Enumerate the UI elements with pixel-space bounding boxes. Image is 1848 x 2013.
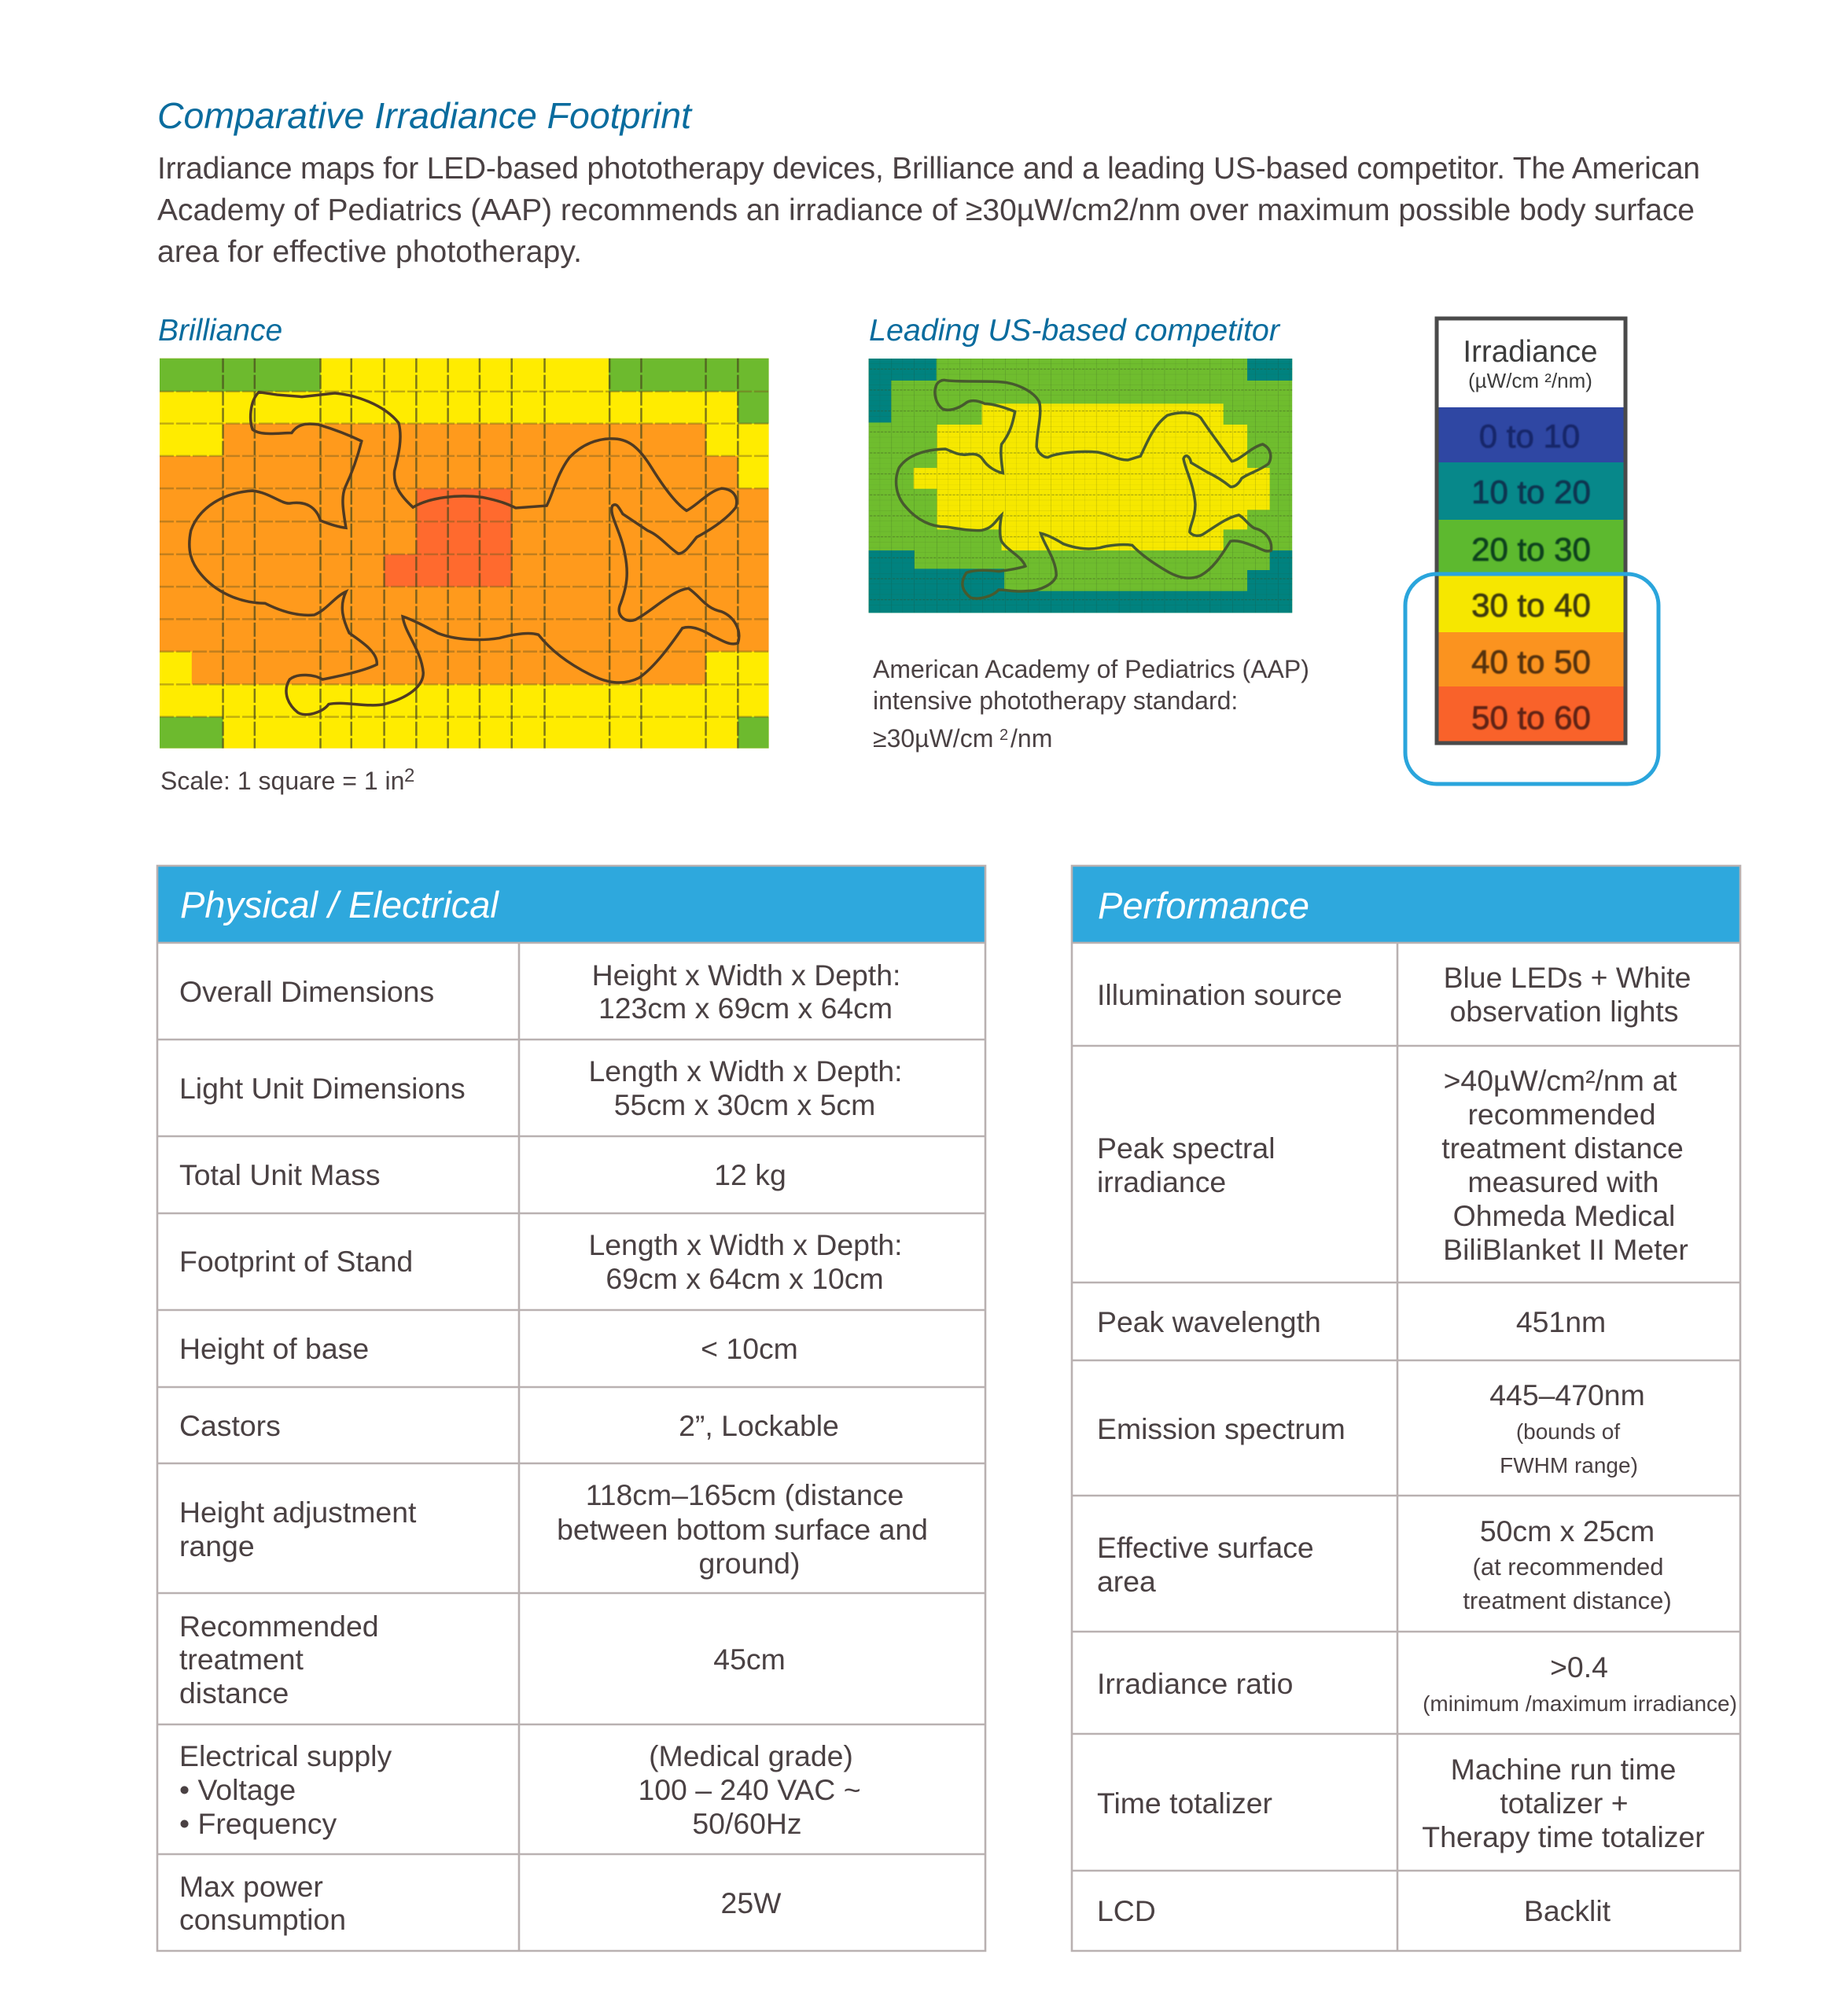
row: overall dimensions: Overall Dimensions: [179, 975, 434, 1008]
row: effective surface area: 50cm x 25cm: [1480, 1514, 1655, 1547]
row: total unit mass: [179, 1158, 786, 1191]
row: recommended treatment distance: [179, 1610, 786, 1709]
table header: Performance: [1098, 885, 1309, 926]
row: footprint of stand: Footprint of Stand: [179, 1245, 413, 1278]
scale note: Scale: 1 square = 1 in: [160, 767, 404, 795]
legend: irradiance scale: 30 to 40: [1471, 587, 1591, 624]
row: illumination source: [1097, 961, 1691, 1028]
row: overall dimensions: Height x Width x Depth:: [592, 959, 900, 992]
row: footprint of stand: Length x Width x Depth:: [588, 1228, 903, 1261]
row: effective surface area: treatment distance): [1463, 1587, 1672, 1614]
row: LCD: Backlit: [1524, 1894, 1611, 1927]
AAP standard note: intensive phototherapy standard:: [873, 686, 1238, 715]
row: height of base: Height of base: [179, 1332, 369, 1365]
legend: irradiance scale: 40 to 50: [1471, 643, 1591, 680]
legend: irradiance scale: 10 to 20: [1471, 473, 1591, 510]
row: effective surface area: [1097, 1514, 1672, 1614]
row: time totalizer: totalizer +: [1500, 1787, 1629, 1820]
row: irradiance ratio: >0.4: [1550, 1651, 1608, 1684]
row: peak spectral irradiance: Ohmeda Medical: [1453, 1199, 1675, 1232]
row: recommended treatment distance: 45cm: [713, 1643, 786, 1676]
row: peak spectral irradiance: >40µW/cm²/nm at: [1444, 1064, 1677, 1097]
row: height adjustment range: [179, 1478, 928, 1580]
row: footprint of stand: 69cm x 64cm x 10cm: [606, 1262, 884, 1295]
row: peak spectral irradiance: Peak spectral: [1097, 1132, 1276, 1165]
row: max power consumption: 25W: [721, 1886, 782, 1919]
row: emission spectrum: (bounds of: [1516, 1419, 1620, 1444]
title: Comparative Irradiance Footprint: [157, 95, 693, 136]
row: recommended treatment distance: Recommended: [179, 1610, 379, 1643]
legend: irradiance scale: 50 to 60: [1471, 699, 1591, 736]
callout: recommended range highlight: [1405, 574, 1658, 784]
row: irradiance ratio: Irradiance ratio: [1097, 1667, 1293, 1700]
row: emission spectrum: [1097, 1378, 1645, 1478]
intro paragraph: Irradiance maps for LED-based phototherapy devices, Brilliance and a leading US-based competitor. The American: [157, 152, 1700, 186]
row: castors: 2”, Lockable: [679, 1409, 839, 1442]
row: time totalizer: [1097, 1753, 1705, 1853]
infant outline: [896, 380, 1272, 598]
row: electrical supply: • Voltage: [179, 1773, 296, 1806]
row: height of base: [179, 1332, 798, 1365]
row: height adjustment range: between bottom surface and: [557, 1513, 928, 1546]
row: recommended treatment distance: treatment: [179, 1643, 304, 1676]
row: light unit dimensions: [179, 1054, 903, 1121]
legend: irradiance scale: Irradiance: [1463, 335, 1598, 369]
row: total unit mass: Total Unit Mass: [179, 1158, 381, 1191]
panel: Performance table: [1072, 866, 1740, 1951]
row: irradiance ratio: [1097, 1651, 1737, 1716]
row: height adjustment range: 118cm–165cm (distance: [586, 1478, 904, 1511]
row: peak spectral irradiance: irradiance: [1097, 1165, 1226, 1198]
row: illumination source: Illumination source: [1097, 978, 1342, 1011]
row: emission spectrum: FWHM range): [1500, 1453, 1638, 1478]
row: peak spectral irradiance: [1097, 1064, 1688, 1266]
row: total unit mass: 12 kg: [714, 1158, 786, 1191]
row: castors: Castors: [179, 1409, 281, 1442]
AAP standard note: 2: [999, 727, 1008, 744]
row: recommended treatment distance: distance: [179, 1676, 289, 1709]
row: electrical supply: 100 – 240 VAC ~: [638, 1773, 861, 1806]
row: height adjustment range: Height adjustment: [179, 1496, 417, 1529]
row: effective surface area: area: [1097, 1565, 1156, 1598]
intro paragraph: [157, 152, 1700, 269]
intro paragraph: Academy of Pediatrics (AAP) recommends an irradiance of ≥30µW/cm2/nm over maximum possible body surface: [157, 193, 1695, 227]
row: castors: [179, 1409, 839, 1442]
row: height of base: < 10cm: [701, 1332, 798, 1365]
infant outline: [190, 392, 739, 715]
row: effective surface area: (at recommended: [1473, 1553, 1663, 1581]
row: peak spectral irradiance: measured with: [1467, 1165, 1659, 1198]
row: light unit dimensions: Length x Width x Depth:: [588, 1054, 903, 1087]
row: LCD: LCD: [1097, 1894, 1156, 1927]
row: overall dimensions: [179, 959, 900, 1025]
row: electrical supply: 50/60Hz: [692, 1807, 802, 1840]
row: time totalizer: Time totalizer: [1097, 1787, 1272, 1820]
row: peak spectral irradiance: BiliBlanket II Meter: [1443, 1233, 1688, 1266]
scale note: 2: [404, 765, 414, 786]
heatmap: Brilliance irradiance map: [160, 359, 769, 749]
row: max power consumption: Max power: [179, 1870, 323, 1903]
legend: irradiance scale: (µW/cm ²/nm): [1468, 369, 1592, 392]
panel: Physical / Electrical table: [157, 866, 985, 1951]
table header: [1072, 866, 1740, 943]
row: emission spectrum: Emission spectrum: [1097, 1412, 1346, 1445]
row: time totalizer: Machine run time: [1451, 1753, 1676, 1786]
row: electrical supply: • Frequency: [179, 1807, 337, 1840]
intro paragraph: area for effective phototherapy.: [157, 235, 582, 269]
row: peak spectral irradiance: treatment distance: [1441, 1132, 1684, 1165]
heading: Brilliance: Brilliance: [158, 314, 282, 348]
row: peak spectral irradiance: recommended: [1467, 1098, 1656, 1131]
row: light unit dimensions: 55cm x 30cm x 5cm: [614, 1088, 875, 1121]
AAP standard note: ≥30µW/cm: [873, 724, 993, 753]
row: height adjustment range: ground): [699, 1547, 800, 1580]
row: electrical supply: Electrical supply: [179, 1739, 392, 1772]
row: overall dimensions: 123cm x 69cm x 64cm: [598, 992, 893, 1025]
row: max power consumption: consumption: [179, 1903, 346, 1936]
AAP standard note: American Academy of Pediatrics (AAP): [873, 655, 1309, 683]
legend: irradiance scale: [1437, 318, 1625, 743]
row: height adjustment range: range: [179, 1529, 255, 1562]
table header: Physical / Electrical: [180, 884, 499, 926]
row: max power consumption: [179, 1870, 782, 1936]
row: time totalizer: Therapy time totalizer: [1422, 1820, 1705, 1853]
row: light unit dimensions: Light Unit Dimensions: [179, 1072, 466, 1105]
row: emission spectrum: 445–470nm: [1489, 1378, 1645, 1411]
row: irradiance ratio: (minimum /maximum irradiance): [1423, 1691, 1737, 1716]
row: electrical supply: [179, 1739, 861, 1840]
row: effective surface area: Effective surface: [1097, 1531, 1314, 1564]
row: electrical supply: (Medical grade): [649, 1739, 853, 1772]
AAP standard note: /nm: [1011, 724, 1052, 753]
row: peak wavelength: 451nm: [1516, 1305, 1606, 1338]
heading: competitor: Leading US-based competitor: [869, 314, 1281, 348]
row: illumination source: observation lights: [1450, 995, 1678, 1028]
row: illumination source: Blue LEDs + White: [1444, 961, 1691, 994]
row: peak wavelength: [1097, 1305, 1606, 1338]
AAP standard note: [873, 655, 1309, 753]
heatmap: competitor irradiance map: [869, 359, 1292, 613]
table header: [157, 866, 985, 943]
row: footprint of stand: [179, 1228, 903, 1295]
legend: irradiance scale: 20 to 30: [1471, 531, 1591, 568]
row: peak wavelength: Peak wavelength: [1097, 1305, 1321, 1338]
row: LCD: [1097, 1894, 1611, 1927]
legend: irradiance scale: 0 to 10: [1479, 418, 1580, 454]
